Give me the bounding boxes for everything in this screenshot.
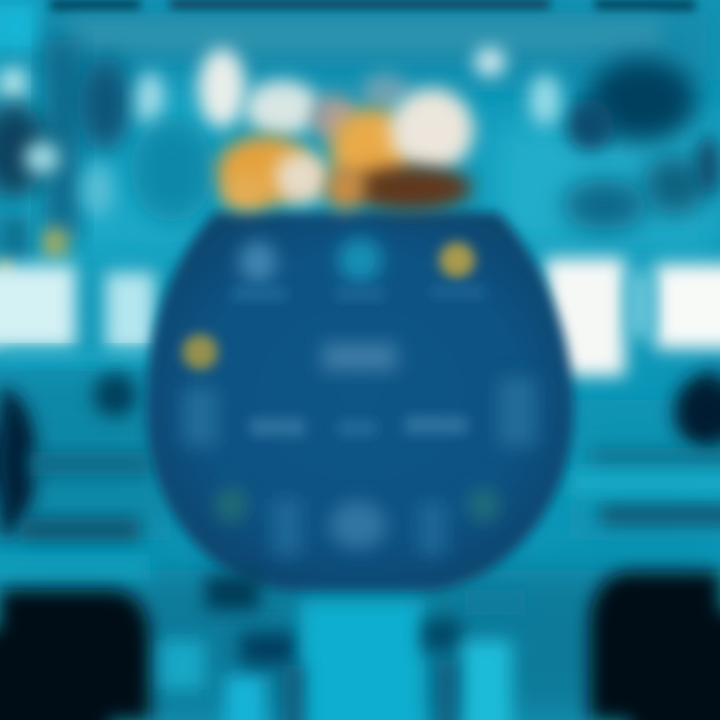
text block: top centre (335, 288, 385, 300)
icon: left yellow (182, 334, 218, 370)
right dark circle (674, 370, 720, 454)
bottom left black block (0, 590, 150, 720)
icon: lower left (216, 488, 246, 522)
text block: middle left (250, 418, 305, 436)
text block: lower centre (330, 501, 386, 549)
left lower stripes (0, 452, 150, 580)
text block: left column (183, 388, 218, 446)
icon: lower right (469, 488, 499, 522)
header band (70, 20, 660, 50)
left white panel (0, 265, 170, 364)
left dark silhouette (0, 385, 36, 540)
left dark circle (93, 373, 137, 417)
text block: lower left (272, 498, 302, 556)
text block: right column (498, 378, 536, 446)
right lower stripes (570, 448, 720, 525)
left edge panel (0, 0, 214, 285)
icon: top left (239, 241, 277, 283)
text block: centre (322, 343, 397, 371)
food pile illustration (198, 48, 474, 210)
text block: lower right (418, 503, 446, 555)
bottom columns (160, 575, 525, 720)
text block: middle right (405, 416, 467, 434)
text block: middle (338, 420, 376, 436)
bottom right black block (590, 572, 720, 720)
text block: top right (430, 286, 485, 298)
central round panel (146, 212, 574, 592)
right white panel (545, 258, 720, 376)
text block: top left (232, 288, 287, 300)
icon: top right yellow (439, 242, 475, 278)
right top circles (474, 47, 720, 231)
top dark bar (50, 0, 695, 10)
icon: top centre (338, 238, 382, 282)
